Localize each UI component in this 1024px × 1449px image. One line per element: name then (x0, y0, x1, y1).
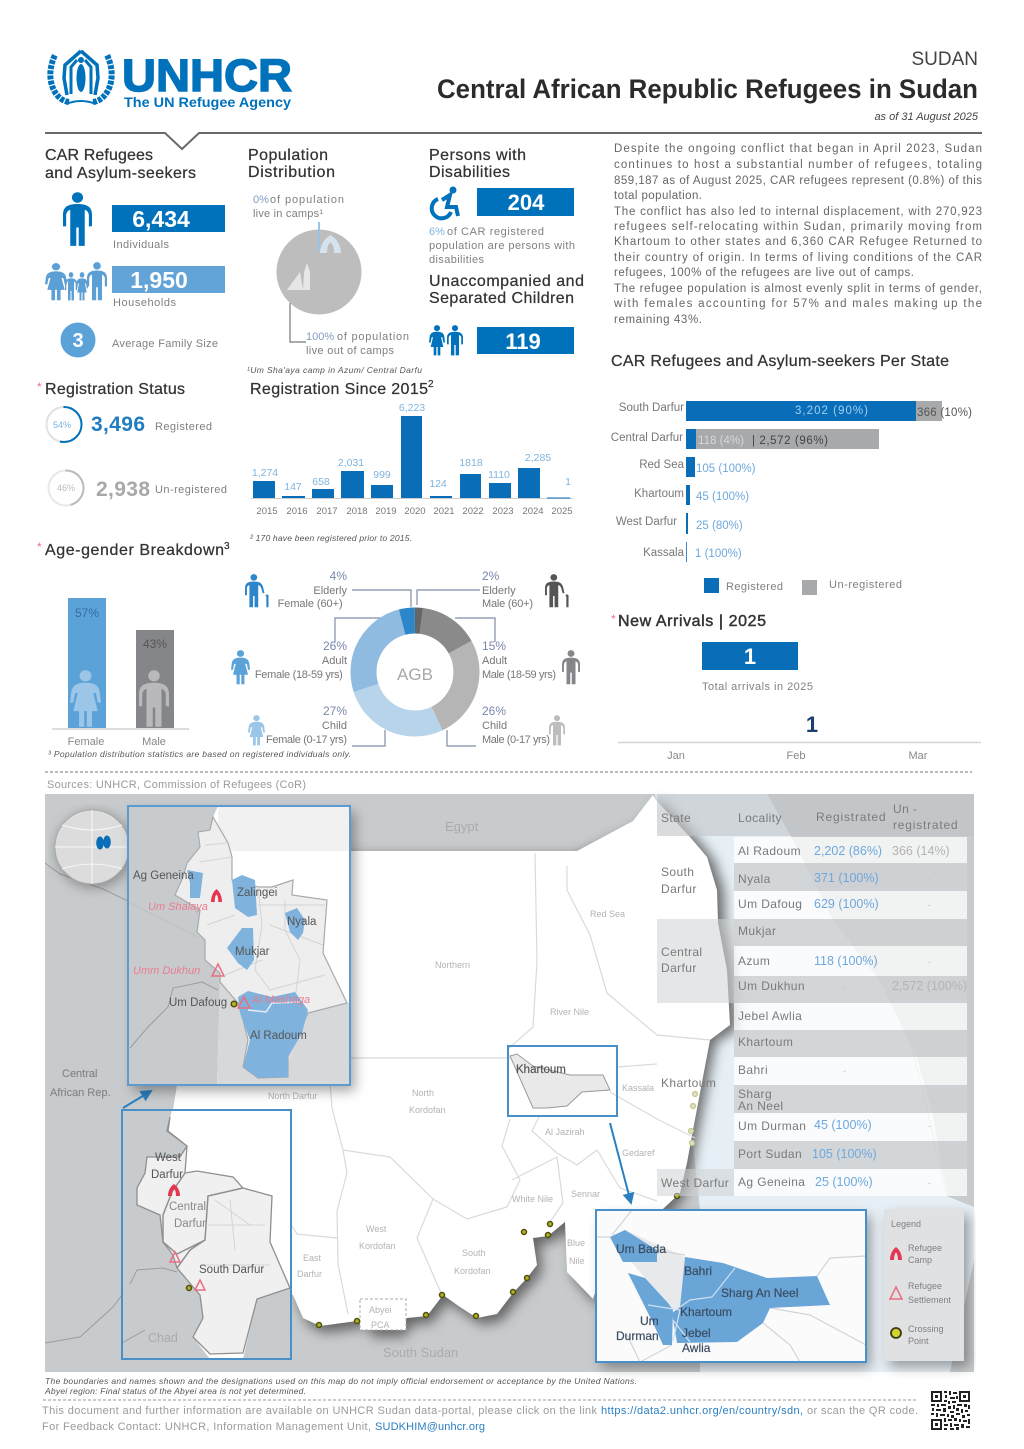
table rows: Nyala (738, 872, 771, 886)
left donut labels: Adult (322, 655, 347, 667)
left donut labels: 4% (330, 569, 347, 583)
table rows: - (928, 957, 931, 967)
heading: and Asylum-seekers (45, 165, 196, 182)
panel: population distribution (247, 147, 422, 375)
map disclaimer: The boundaries and names shown and the designations used on this map do not imply official endorsement or acceptance by the United Nations. (45, 1376, 637, 1386)
right donut labels: 15% (482, 639, 506, 653)
table rows: 2,572 (100%) (892, 979, 967, 993)
footnote: ³ Population distribution statistics are based on registered individuals only. (48, 749, 351, 759)
registered label: Registered (155, 421, 212, 433)
panel: registration since 2015 (250, 379, 573, 543)
panel: narrative text (613, 143, 987, 326)
inset: locality detail: Nyala (287, 916, 317, 928)
monthly chart: Jan (667, 750, 685, 762)
disabilities text: disabilities (429, 254, 484, 266)
bar chart: 1 (565, 476, 571, 488)
leader line: out of camps (290, 303, 306, 342)
panel: per state chart (611, 353, 972, 595)
bar chart: 147 (284, 481, 302, 493)
icon: wheelchair (432, 186, 458, 218)
state bar chart: 1 (100%) (695, 548, 742, 560)
map region labels: Kordofan (454, 1266, 491, 1276)
bar chart: 2025 (551, 506, 573, 517)
map region labels: South Sudan (383, 1345, 458, 1360)
table header: Locality (738, 811, 782, 825)
state bar chart: 105 (100%) (696, 463, 756, 475)
inset: Khartoum detail: Sharg An Neel (721, 1286, 798, 1300)
bar chart (251, 402, 573, 517)
bar chart: 1110 (488, 469, 510, 481)
map region labels: North Darfur (268, 1091, 318, 1101)
paragraph: remaining 43%. (614, 314, 702, 326)
donut centre label: AGB (397, 665, 433, 684)
map region labels: East (303, 1253, 322, 1263)
heading: New Arrivals | 2025 (618, 613, 766, 630)
un-registered label: Un-registered (155, 484, 227, 496)
out of camps label: live out of camps (306, 345, 394, 357)
table rows: - (928, 1121, 931, 1131)
map region labels: Kassala (622, 1083, 654, 1093)
heading: Unaccompanied and (429, 273, 584, 290)
state bar chart (611, 401, 972, 562)
state bar chart: West Darfur (616, 516, 677, 528)
table rows: Um Durman (738, 1119, 806, 1133)
registered value: 3,496 (91, 413, 145, 436)
total label: Total arrivals in 2025 (702, 681, 813, 693)
table header: Un - (893, 802, 917, 816)
map region labels: Blue (567, 1238, 585, 1248)
map region labels: South (462, 1248, 486, 1258)
marker: * (37, 540, 42, 554)
bar chart: 2024 (522, 506, 544, 517)
map legend: Point (908, 1336, 929, 1346)
heading: Registration Status (45, 381, 185, 398)
individuals value box (112, 205, 225, 232)
state bar chart: | 2,572 (96%) (752, 435, 828, 447)
inset: locality detail: Umm Dukhun (133, 965, 200, 977)
arrow: inset 2 to inset 1 (123, 1091, 151, 1108)
bar chart: 1,274 (252, 467, 278, 479)
households value box (112, 266, 225, 293)
table rows: 25 (100%) (815, 1175, 873, 1189)
icon: family (45, 262, 107, 300)
bar chart: 2,285 (525, 452, 551, 464)
map region labels: Sennar (571, 1189, 600, 1199)
inset: Khartoum detail: Khartoum (680, 1305, 732, 1319)
footer text: https://data2.unhcr.org/en/country/sdn, (601, 1405, 803, 1417)
map region labels: Al Jazirah (545, 1127, 585, 1137)
inset: Khartoum locator (508, 1046, 617, 1116)
bar chart: 2019 (375, 506, 397, 517)
value box: 1 (744, 644, 756, 669)
table rows: Central (661, 945, 702, 959)
table rows (657, 837, 967, 1196)
table rows: Mukjar (738, 924, 776, 938)
icon: children (429, 325, 463, 355)
disabilities text: of CAR registered (447, 226, 544, 238)
map region labels: African Rep. (50, 1087, 111, 1099)
map region labels: North (412, 1088, 434, 1098)
monthly chart: Feb (787, 750, 805, 762)
left donut labels: Child (322, 720, 347, 732)
bar chart: 1818 (459, 457, 483, 469)
value box (702, 642, 798, 670)
bar chart: 2018 (346, 506, 368, 517)
footer text: For Feedback Contact: UNHCR, Information Management Unit, (42, 1421, 371, 1433)
title: Central African Republic Refugees in Sudan (437, 74, 978, 104)
table rows: Bahri (738, 1063, 768, 1077)
inset: locality detail (128, 806, 350, 1085)
left donut labels: Female (18-59 yrs) (255, 669, 343, 681)
table header: State (661, 811, 691, 825)
map region labels: PCA (371, 1320, 390, 1330)
panel: CAR refugees and asylum-seekers (45, 147, 225, 358)
right donut labels: 2% (482, 569, 500, 583)
in camps label: 0% (253, 194, 269, 206)
out of camps label: 100% (306, 331, 334, 343)
paragraph: Despite the ongoing conflict that began in April 2023, Sudan (614, 143, 982, 155)
map legend: Legend (891, 1219, 921, 1229)
state bar chart: 118 (4%) (698, 435, 744, 447)
left donut labels: Elderly (313, 585, 347, 597)
table rows: Darfur (661, 882, 697, 896)
inset: locality detail: Mukjar (235, 946, 270, 958)
legend (704, 578, 902, 595)
table rows: Port Sudan (738, 1147, 802, 1161)
map legend: Settlement (908, 1295, 952, 1305)
legend: Un-registered (829, 579, 902, 591)
bar chart: 6,223 (399, 402, 425, 414)
inset: Khartoum detail: Durman (616, 1329, 659, 1343)
table rows: - (928, 900, 931, 910)
date: as of 31 August 2025 (874, 111, 979, 123)
population circle (276, 230, 362, 314)
inset: locality detail: Um Shalaya (148, 901, 208, 913)
map region labels: Red Sea (590, 909, 625, 919)
map legend: Crossing (908, 1324, 944, 1334)
table rows: Azum (738, 954, 770, 968)
bar chart: 999 (373, 469, 391, 481)
heading: Distribution (248, 164, 335, 181)
sources: Sources: UNHCR, Commission of Refugees (CoR) (47, 779, 306, 791)
panel: unaccompanied and separated children (429, 273, 584, 355)
heading: Population (248, 147, 328, 164)
heading superscript: 3 (224, 541, 230, 552)
inset: Khartoum detail (596, 1210, 866, 1362)
table rows: West Darfur (661, 1176, 729, 1190)
map region labels: Gedaref (622, 1148, 655, 1158)
state bar chart: South Darfur (619, 402, 684, 414)
state bar chart: Khartoum (634, 488, 684, 500)
inset: Khartoum detail: Bahri (684, 1264, 712, 1278)
value box (477, 188, 574, 216)
inset: locality detail: Ag Geneina (133, 870, 194, 882)
bar chart: 2022 (462, 506, 484, 517)
panel: registration status (37, 380, 227, 506)
logo wordmark: UNHCR (122, 50, 292, 101)
disabilities text: population are persons with (429, 240, 575, 252)
monthly chart: Mar (909, 750, 928, 762)
paragraph: refugees, 100% of the refugees are live out of camps. (614, 267, 914, 279)
arrow: Khartoum to detail (610, 1123, 631, 1203)
table rows: Khartoum (661, 1076, 716, 1090)
leader lines (335, 590, 495, 746)
state bar chart: 25 (80%) (696, 520, 743, 532)
un-registered value: 2,938 (96, 478, 150, 501)
bar chart: 658 (312, 476, 330, 488)
individuals value box: 6,434 (132, 206, 190, 232)
icon: person (63, 192, 92, 246)
panel: age-gender breakdown (37, 540, 580, 759)
heading superscript: 2 (428, 379, 434, 390)
inset: locality detail: Zalingei (237, 887, 277, 899)
gender bar chart: 43% (143, 637, 167, 651)
bar chart: 2017 (316, 506, 338, 517)
state bar chart: Kassala (643, 547, 685, 559)
table rows: Darfur (661, 961, 697, 975)
inset: Darfur overview: Central (169, 1201, 206, 1213)
map legend: Refugee (908, 1243, 942, 1253)
registered ring: 54% (53, 420, 71, 430)
state bar chart: 45 (100%) (696, 491, 749, 503)
monthly chart (618, 712, 981, 762)
table rows: - (843, 1066, 846, 1076)
bar chart: 124 (429, 478, 447, 490)
table rows: - (843, 982, 846, 992)
table header (657, 794, 974, 836)
panel: map (45, 794, 974, 1372)
icon: family size circle: 3 (72, 330, 84, 352)
marker: * (611, 612, 616, 626)
map region labels: Darfur (297, 1269, 322, 1279)
state boundaries (272, 853, 710, 1314)
map region labels: White Nile (512, 1194, 553, 1204)
map legend: Camp (908, 1255, 932, 1265)
icon: settlement (287, 263, 310, 290)
crossing points (316, 1194, 680, 1328)
table rows: Jebel Awlia (738, 1009, 802, 1023)
gender bar chart: Male (142, 736, 166, 748)
map legend: Refugee (908, 1281, 942, 1291)
paragraph: Khartoum to other states and 6,360 CAR Refugee Returned to (614, 236, 982, 248)
inset: Khartoum detail: Um (640, 1314, 659, 1328)
sea (655, 794, 974, 1372)
left donut labels: Female (60+) (278, 598, 343, 610)
header rule with notch (45, 133, 982, 149)
icon: camp tent (320, 235, 341, 253)
map background (45, 794, 974, 1372)
gender bar chart: Female (68, 736, 104, 748)
table header: Registrated (816, 810, 886, 824)
heading: Separated Children (429, 290, 574, 307)
right donut labels: Male (0-17 yrs) (482, 734, 550, 746)
in camps label: live in camps¹ (253, 208, 323, 220)
AGB donut chart (364, 620, 466, 724)
table rows: 366 (14%) (892, 844, 950, 858)
inset: locality detail: Al Mashaga (251, 994, 310, 1006)
table rows: 45 (100%) (814, 1118, 872, 1132)
logo tagline: The UN Refugee Agency (124, 94, 291, 110)
gender bar chart (52, 598, 189, 748)
inset: Khartoum detail: Jebel (682, 1326, 711, 1340)
table rows: South (661, 865, 694, 879)
bar chart: 2021 (433, 506, 455, 517)
map region labels (50, 819, 655, 1360)
map region labels: Nile (569, 1256, 585, 1266)
table rows: Al Radoum (738, 844, 801, 858)
state bar chart: Central Darfur (611, 432, 683, 444)
heading: Disabilities (429, 164, 510, 181)
inset: Khartoum detail: Awlia (682, 1341, 711, 1355)
map region labels: River Nile (550, 1007, 589, 1017)
inset: Darfur overview: Darfur (151, 1169, 183, 1181)
households label: Households (113, 297, 176, 309)
coast lines (780, 794, 974, 1206)
panel: new arrivals (611, 612, 981, 762)
paragraph: total population. (614, 190, 702, 202)
inset: Darfur overview (122, 1110, 291, 1359)
paragraph: with females accounting for 57% and males making up the (613, 298, 982, 310)
right donut labels: Male (60+) (482, 598, 533, 610)
un-registered ring: 46% (57, 483, 75, 493)
inset: Darfur overview: South Darfur (199, 1264, 264, 1276)
table (657, 794, 974, 1196)
table rows: Khartoum (738, 1035, 793, 1049)
registered ring (46, 407, 82, 442)
left donut labels: 27% (323, 704, 347, 718)
sudan land (173, 795, 730, 1330)
heading: CAR Refugees (45, 147, 153, 164)
bar chart: 2,031 (338, 457, 364, 469)
paragraph: 859,187 as of August 2025, CAR refugees represent (0.8%) of this (614, 175, 982, 187)
table rows: - (928, 874, 931, 884)
state bar chart: Red Sea (639, 459, 685, 471)
table rows: 118 (100%) (814, 954, 878, 968)
panel: persons with disabilities (429, 147, 575, 266)
value box (477, 327, 574, 354)
icons: age groups (231, 574, 580, 745)
disabilities text: 6% (429, 226, 445, 238)
sudan shadow (240, 800, 737, 1337)
heading: Age-gender Breakdown (45, 542, 224, 559)
family size label: Average Family Size (112, 338, 218, 350)
left donut labels: Female (0-17 yrs) (266, 734, 347, 746)
inset: Khartoum locator: Khartoum (516, 1064, 566, 1076)
monthly chart: 1 (806, 712, 818, 737)
right donut labels: Child (482, 720, 507, 732)
map region labels: Egypt (445, 819, 479, 834)
inset: Darfur overview: West (155, 1152, 182, 1164)
map legend (884, 1209, 964, 1361)
UNHCR logo (50, 50, 292, 110)
inset: locality detail: Um Dafoug (169, 997, 227, 1009)
paragraph: The conflict has also led to internal displacement, with 270,923 (614, 206, 982, 218)
individuals label: Individuals (113, 239, 170, 251)
inset: Darfur overview: Chad (148, 1331, 178, 1345)
globe locator (55, 810, 132, 888)
heading: CAR Refugees and Asylum-seekers Per State (611, 353, 949, 370)
footnote: ² 170 have been registered prior to 2015. (250, 533, 412, 543)
footer text: This document and further information are available on UNHCR Sudan data-portal, please click on the link (42, 1405, 598, 1417)
table rows: 629 (100%) (814, 897, 879, 911)
icon: UNHCR emblem (50, 51, 112, 104)
out of camps label: of population (337, 331, 409, 343)
bar chart: 2015 (256, 506, 278, 517)
bar chart: 2020 (404, 506, 426, 517)
table rows: Sharg (738, 1087, 772, 1101)
inset: Khartoum detail: Um Bada (616, 1242, 666, 1256)
table rows: 2,202 (86%) (814, 844, 882, 858)
map region labels: Kordofan (359, 1241, 396, 1251)
right donut labels: Adult (482, 655, 507, 667)
paragraph: continues to host a substantial number of refugees, totaling (614, 159, 982, 171)
un-registered ring (48, 470, 84, 506)
state bar chart: 3,202 (90%) (795, 405, 868, 417)
state bar chart: 366 (10%) (917, 407, 972, 419)
table rows: - (928, 1178, 931, 1188)
map region labels: West (366, 1224, 387, 1234)
bar chart: 2023 (492, 506, 514, 517)
in camps label: of population (270, 194, 344, 206)
heading: Persons with (429, 147, 526, 164)
country label: SUDAN (911, 49, 978, 70)
map region labels: Northern (435, 960, 470, 970)
table rows: An Neel (738, 1099, 784, 1113)
table rows: 371 (100%) (814, 871, 879, 885)
paragraph: refugees self-relocating within Sudan, primarily moving from (614, 221, 982, 233)
bar chart: 2016 (286, 506, 308, 517)
map disclaimer: Abyei region: Final status of the Abyei area is not yet determined. (44, 1386, 306, 1396)
leader line: in camps (318, 222, 320, 250)
map country border lines (45, 863, 177, 1343)
legend: Registered (726, 581, 783, 593)
footer text: or scan the QR code. (807, 1405, 918, 1417)
icon: family size circle (60, 322, 96, 358)
inset: Darfur overview: Darfur (174, 1218, 206, 1230)
QR code (931, 1391, 970, 1430)
value box: 119 (505, 329, 541, 354)
table rows: Um Dukhun (738, 979, 805, 993)
right donut labels: 26% (482, 704, 506, 718)
left donut labels: 26% (323, 639, 347, 653)
camp footnote: ¹Um Sha'aya camp in Azum/ Central Darfu (247, 365, 422, 375)
marker: * (37, 380, 42, 394)
table rows: Um Dafoug (738, 897, 802, 911)
footer text: SUDKHIM@unhcr.org (375, 1421, 485, 1433)
right donut labels: Male (18-59 yrs) (482, 669, 556, 681)
map region labels: Central (62, 1068, 97, 1080)
paragraph: their country of origin. In terms of living conditions of the CAR (614, 252, 982, 264)
heading: Registration Since 2015 (250, 381, 428, 398)
map region labels: Abyei (369, 1305, 392, 1315)
inset: locality detail: Al Radoum (250, 1030, 307, 1042)
gender bar chart: 57% (75, 606, 99, 620)
map region labels: Kordofan (409, 1105, 446, 1115)
paragraph: The refugee population is almost evenly split in terms of gender, (614, 283, 982, 295)
households value box: 1,950 (130, 267, 188, 293)
right donut labels: Elderly (482, 585, 516, 597)
table rows: 105 (100%) (812, 1147, 877, 1161)
table header: registrated (893, 818, 958, 832)
table rows: Ag Geneina (738, 1175, 805, 1189)
value box: 204 (508, 190, 545, 215)
